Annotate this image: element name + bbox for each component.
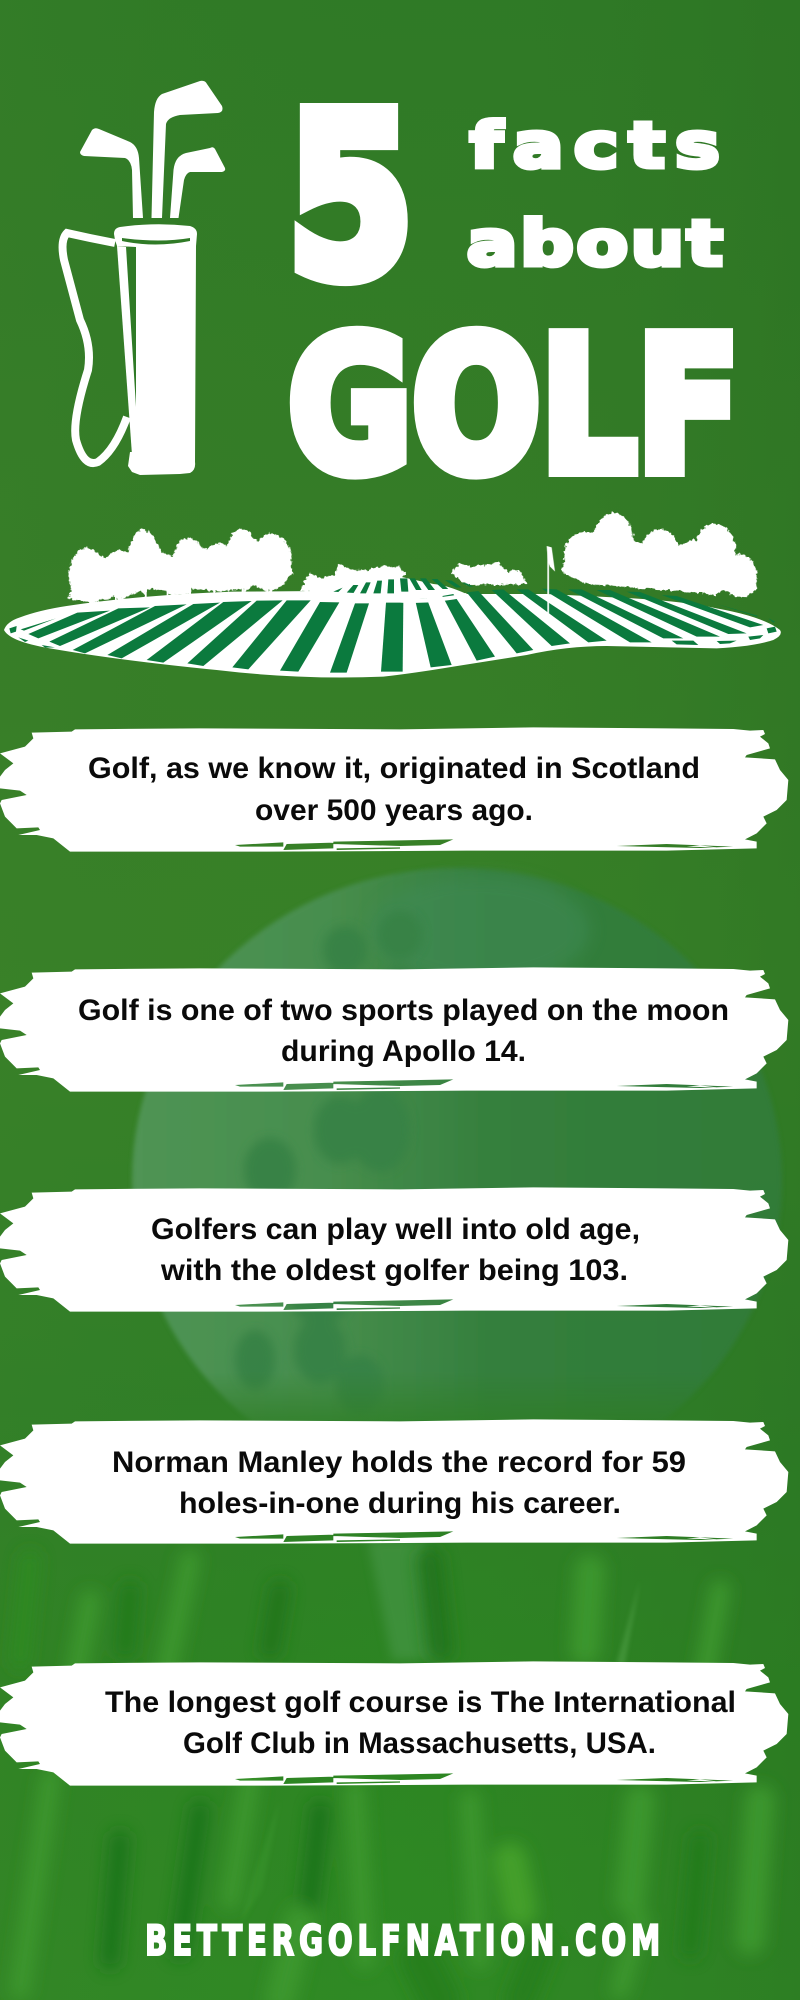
bag collar slit: [122, 238, 190, 244]
illustration: golf course: [4, 513, 781, 677]
fact 4 text: Norman Manley holds the record for 59: [112, 1446, 686, 1479]
title word facts: facts: [470, 110, 720, 182]
grass blades: [20, 1560, 760, 2000]
golf tee: [368, 1540, 440, 1660]
panel: fact 5: [0, 1661, 788, 1786]
icon: left club: [80, 128, 143, 218]
fact 2 text: Golf is one of two sports played on the moon: [78, 994, 729, 1027]
panel: fact 1: [0, 727, 788, 852]
icon: golf bag with clubs: [63, 81, 225, 475]
fact 2 text: during Apollo 14.: [281, 1035, 526, 1068]
fairway stripes: [9, 578, 777, 673]
title: [287, 67, 740, 514]
trees: groves: [68, 513, 758, 603]
title number 5: 5: [287, 67, 414, 329]
icon: bag body: [114, 224, 197, 475]
fact 4 text: holes-in-one during his career.: [179, 1487, 621, 1520]
panel: fact 2: [0, 967, 788, 1092]
fact 1 text: over 500 years ago.: [255, 794, 533, 827]
background: green gradient with blurred grass: [0, 516, 782, 2000]
flag and pole: [547, 546, 555, 613]
fact 3 text: Golfers can play well into old age,: [151, 1213, 640, 1246]
icon: centre club: [152, 81, 222, 218]
footer website: BETTERGOLFNATION.COM: [145, 1916, 660, 1965]
panel: fact 3: [0, 1187, 788, 1312]
fact 5 text: Golf Club in Massachusetts, USA.: [183, 1727, 656, 1760]
icon: right club: [170, 147, 225, 218]
fact 1 text: Golf, as we know it, originated in Scotland: [88, 752, 700, 785]
golf ball: [130, 866, 782, 1421]
tree trunks: [89, 587, 268, 605]
title word about: about: [467, 208, 723, 280]
fairway divider line: [320, 594, 467, 601]
fact 5 text: The longest golf course is The International: [105, 1686, 736, 1719]
course fairway: [4, 576, 781, 677]
panel: fact 4: [0, 1419, 788, 1544]
icon: stand leg: [117, 246, 139, 455]
icon: carrying strap: [63, 233, 127, 463]
fact 3 text: with the oldest golfer being 103.: [160, 1254, 628, 1287]
